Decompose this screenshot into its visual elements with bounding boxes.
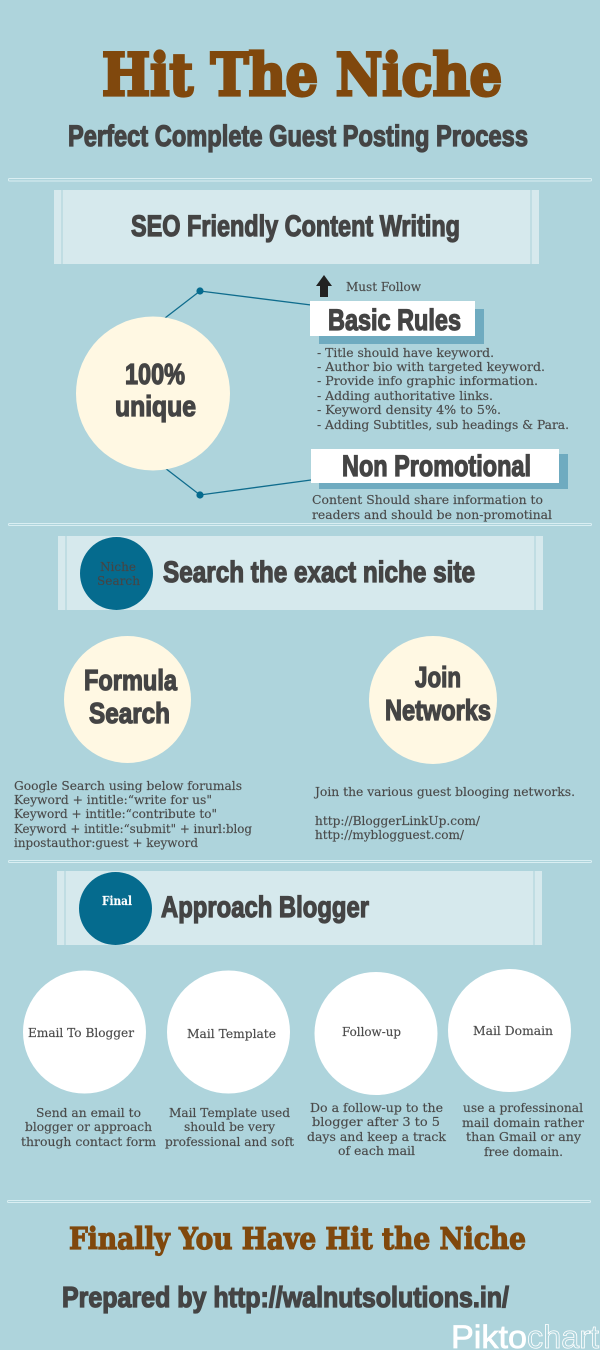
text: formula search [14, 779, 252, 850]
badge: niche search [80, 537, 153, 610]
text: join networks: http://BloggerLinkUp.com/ [315, 814, 481, 828]
step: mail domain [448, 969, 584, 1159]
closing heading: Finally You Have Hit the Niche [69, 1222, 526, 1257]
circle: formula search [64, 636, 191, 763]
heading: approach: Approach Blogger [161, 891, 369, 924]
step: mail template: professional and soft [165, 1135, 294, 1149]
step: email to blogger: blogger or approach [25, 1120, 152, 1134]
text: formula search: inpostauthor:guest + keyword [14, 836, 198, 850]
step: mail domain: Mail Domain [473, 1024, 553, 1038]
list: basic rules: - Keyword density 4% to 5%. [317, 403, 501, 417]
text: non promotional [312, 493, 552, 522]
list: basic rules [317, 346, 569, 432]
logo: Piktochart [451, 1319, 599, 1350]
text: join networks: http://myblogguest.com/ [315, 828, 465, 842]
step: mail domain: use a professinonal [463, 1101, 583, 1115]
step: follow-up: days and keep a track [307, 1130, 447, 1144]
list: basic rules: - Title should have keyword. [317, 346, 494, 360]
badge: final [79, 872, 152, 945]
circle: 100% unique: 100% [125, 359, 185, 391]
step: mail template: should be very [184, 1120, 275, 1134]
heading: search: Search the exact niche site [163, 556, 475, 589]
circle: formula search: Search [89, 698, 170, 730]
heading: SEO content: SEO Friendly Content Writing [131, 210, 460, 243]
step: follow-up [307, 972, 447, 1158]
label: must follow: Must Follow [346, 280, 422, 294]
heading box: non promotional: Non Promotional [342, 450, 531, 483]
list: basic rules: - Adding authoritative links. [317, 389, 493, 403]
text: formula search: Google Search using below forumals [14, 779, 242, 793]
text: non promotional: readers and should be non-promotinal [312, 508, 552, 522]
step: mail template: Mail Template [187, 1027, 276, 1041]
text: formula search: Keyword + intitle:“contribute to" [14, 807, 217, 821]
heading box: basic rules [310, 301, 484, 344]
heading box: basic rules: Basic Rules [328, 304, 461, 337]
badge: niche search: Niche [100, 560, 136, 574]
circle: 100% unique [76, 316, 230, 470]
step: follow-up: blogger after 3 to 5 [312, 1115, 440, 1129]
heading box: non promotional [311, 449, 568, 489]
step: mail template: Mail Template used [169, 1106, 290, 1120]
step: email to blogger [21, 970, 157, 1149]
step: mail domain: free domain. [484, 1145, 563, 1159]
badge: niche search: Search [97, 574, 140, 588]
circle: join networks: Networks [385, 695, 491, 727]
circle: join networks: Join [415, 662, 461, 694]
step: mail domain: than Gmail or any [466, 1130, 581, 1144]
step: email to blogger: Email To Blogger [28, 1026, 134, 1040]
step: mail domain: mail domain rather [462, 1116, 584, 1130]
list: basic rules: - Adding Subtitles, sub headings & Para. [317, 418, 569, 432]
title: Hit The Niche [102, 41, 502, 109]
circle: formula search: Formula [84, 665, 178, 697]
text: join networks [313, 785, 575, 842]
badge: final: Final [102, 894, 132, 908]
step: follow-up: Follow-up [342, 1025, 401, 1039]
step: email to blogger: Send an email to [36, 1106, 141, 1120]
text: join networks: Join the various guest blooging networks. [313, 785, 575, 799]
text: formula search: Keyword + intitle:“write for us" [14, 793, 212, 807]
panel: approach blogger [57, 871, 542, 945]
connector lines: 100% unique [165, 287, 311, 499]
step: follow-up: Do a follow-up to the [310, 1101, 443, 1115]
step: email to blogger: through contact form [21, 1135, 157, 1149]
credit line: Prepared by http://walnutsolutions.in/ [62, 1282, 509, 1314]
list: basic rules: - Provide info graphic information. [317, 374, 538, 388]
panel: search the exact niche site [58, 536, 543, 610]
text: non promotional: Content Should share information to [312, 493, 543, 507]
circle: 100% unique: unique [115, 391, 196, 423]
step: follow-up: of each mail [338, 1144, 415, 1158]
icon: up arrow [316, 275, 332, 297]
list: basic rules: - Author bio with targeted keyword. [317, 360, 545, 374]
text: formula search: Keyword + intitle:“submit" + inurl:blog [14, 822, 252, 836]
circle: join networks [369, 636, 497, 764]
panel: SEO friendly content writing [54, 190, 539, 264]
step: mail template [165, 970, 294, 1149]
